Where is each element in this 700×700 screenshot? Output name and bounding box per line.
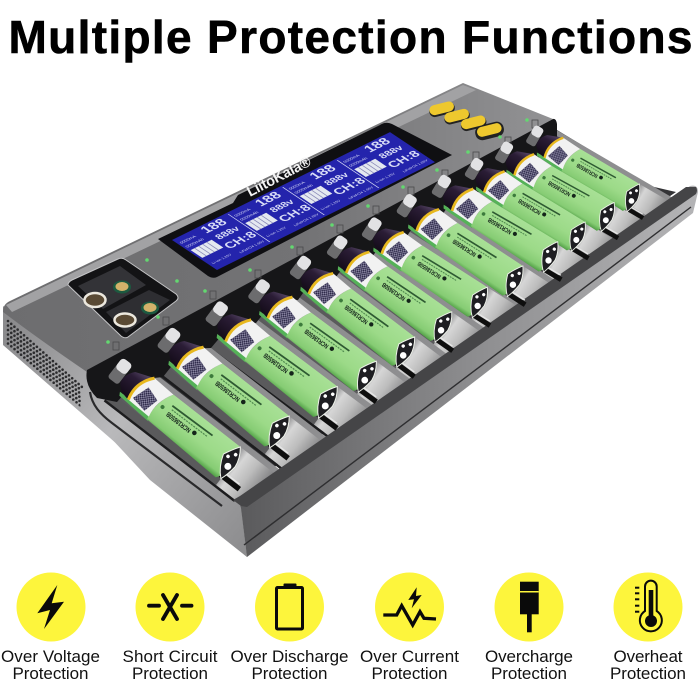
brand logo: LiitoKala® — [244, 154, 314, 201]
icon: broken circuit — [136, 572, 204, 642]
label: overcharge: Protection — [491, 664, 567, 683]
LCD channel 4: 0000mA — [342, 154, 361, 164]
battery 12 — [520, 122, 658, 221]
tray slots — [104, 124, 673, 511]
label: over voltage: Protection — [12, 664, 88, 683]
LCD channel 2: CH:8 — [275, 202, 314, 224]
battery 6: NCR18650B — [381, 281, 407, 302]
feature: overcharge protection — [485, 572, 573, 683]
LCD channel 4: CH:8 — [384, 148, 423, 170]
label: short circuit: Short Circuit — [122, 647, 218, 666]
label: short circuit: Protection — [132, 664, 208, 683]
feature: over voltage protection — [1, 572, 100, 683]
battery 7: NCR18650B — [416, 260, 443, 280]
icon: current spike — [375, 572, 444, 642]
label: overcharge: Overcharge — [485, 647, 573, 666]
LCD channel 4: 888v — [377, 144, 407, 160]
label: over voltage: Over Voltage — [1, 647, 100, 666]
black contact band — [86, 119, 557, 402]
LCD channel 3: 0000mA — [287, 181, 306, 191]
LCD channel 3: 888v — [322, 171, 352, 187]
charger side face — [3, 306, 247, 557]
LCD channel 1: 188 — [197, 216, 231, 235]
icon: lightning bolt — [16, 572, 86, 642]
battery 11: NCR18650B — [547, 179, 572, 197]
LCD channel 2: 0000mAh — [239, 210, 260, 221]
feature: short circuit protection — [122, 572, 218, 683]
LCD channel 2: 888v — [268, 198, 298, 214]
icon: charging plug — [494, 572, 564, 642]
LCD channel 1: 888v — [213, 225, 243, 241]
top plate — [3, 83, 553, 372]
feature: over discharge protection — [230, 572, 348, 683]
battery 11 — [489, 138, 633, 242]
LCD channel 4: 0000mAh — [348, 156, 369, 167]
LCD channel 1 — [174, 214, 267, 267]
label: over current: Over Current — [360, 647, 459, 666]
LCD channel 3: CH:8 — [329, 175, 369, 197]
LCD channel 1: Li-ion 1.25V — [211, 253, 233, 265]
status LEDs — [106, 118, 538, 350]
LCD channel 2 — [228, 187, 321, 240]
icon: empty battery — [255, 572, 324, 642]
battery 7 — [355, 214, 508, 329]
title: Multiple Protection Functions — [8, 11, 692, 63]
ventilation grille — [8, 321, 82, 407]
LCD channel 3: 0000mAh — [293, 183, 315, 194]
label: over discharge: Protection — [252, 664, 328, 683]
battery 10: NCR18650B — [517, 197, 542, 215]
LCD channel 2: Li-ion 1.25V — [265, 226, 288, 238]
yellow control buttons — [428, 100, 505, 142]
battery 9 — [425, 171, 578, 284]
feature: over current protection — [360, 572, 459, 683]
LCD channel 1: 0000mA — [178, 234, 197, 245]
LCD bezel — [158, 123, 452, 278]
LCD channel 3 — [283, 160, 376, 213]
LCD channel 3: Li-ion 1.25V — [320, 199, 342, 211]
LCD channel 1: LiFePO4 1.65V — [238, 240, 266, 254]
label: overheat: Overheat — [614, 647, 683, 666]
battery 8: NCR18650B — [451, 237, 478, 258]
LCD channel 4: LiFePO4 1.65V — [402, 159, 429, 173]
battery 9: NCR18650B — [487, 216, 513, 235]
9V battery compartment — [68, 258, 178, 338]
batteries — [99, 122, 658, 493]
battery 1: NCR18650B — [165, 410, 193, 433]
battery 1 — [99, 355, 261, 493]
battery charger product — [3, 83, 698, 557]
label: overheat: Protection — [610, 664, 686, 683]
battery 5: NCR18650B — [343, 303, 370, 325]
label: over current: Protection — [372, 664, 448, 683]
battery 10 — [458, 154, 605, 262]
LCD channel 2: 188 — [251, 190, 285, 208]
battery 8 — [389, 190, 543, 309]
LCD channel 2: 0000mA — [233, 207, 252, 218]
battery 3 — [197, 297, 358, 432]
feature: overheat protection — [610, 572, 686, 683]
LCD channel 4 — [337, 133, 430, 186]
LCD channel 2: LiFePO4 1.65V — [293, 213, 320, 227]
battery 2 — [148, 324, 310, 462]
left side rail — [80, 385, 247, 557]
battery 3: NCR18650B — [263, 351, 290, 374]
icon: thermometer — [614, 572, 682, 642]
front lip — [240, 186, 698, 557]
battery 12: NCR18650B — [576, 161, 599, 178]
LCD channel 1: 0000mAh — [184, 237, 206, 248]
battery 5 — [281, 252, 435, 380]
battery 2: NCR18650B — [214, 379, 242, 402]
battery 4 — [240, 275, 397, 406]
top plate back edge highlight — [6, 85, 476, 312]
battery 4: NCR18650B — [303, 327, 330, 349]
LCD channel 3: LiFePO4 1.65V — [347, 186, 375, 200]
LCD channel 3: 188 — [306, 163, 340, 181]
LCD screen — [172, 132, 435, 270]
battery 6 — [319, 232, 472, 355]
battery tray — [90, 130, 676, 492]
LCD channel 4: 188 — [360, 136, 394, 154]
LCD channel 4: Li-ion 1.25V — [374, 172, 397, 184]
label: over discharge: Over Discharge — [230, 647, 348, 666]
LCD channel 1: CH:8 — [220, 229, 260, 251]
